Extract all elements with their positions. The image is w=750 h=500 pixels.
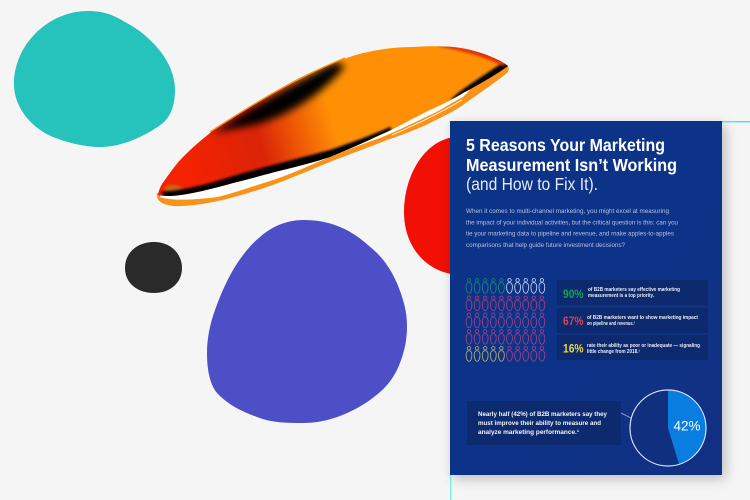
thin cyan line: bottom left	[450, 475, 451, 500]
callout: nearly half: Nearly half (42%) of B2B marketers say they	[478, 411, 607, 418]
pictogram: 10 by 5 people	[466, 278, 545, 361]
title: (and How to Fix It).	[466, 174, 598, 194]
blob: purple	[207, 220, 407, 423]
stat: 90%: measurement is a top priority.	[588, 293, 655, 299]
lens white streak in rim	[392, 100, 462, 135]
stat: 90%	[557, 280, 708, 305]
orange lens shape	[156, 46, 509, 206]
lens top fringe	[210, 58, 345, 132]
callout: nearly half: analyze marketing performance.¹	[478, 429, 579, 436]
blob: red	[404, 137, 480, 275]
panel: infographic card	[450, 121, 722, 475]
lens inner white rim	[160, 90, 470, 200]
stat: 67%: on pipeline and revenue.¹	[587, 321, 635, 327]
blob: teal	[14, 11, 175, 147]
stat: 90%: 90%	[563, 289, 584, 301]
title: 5 Reasons Your Marketing	[466, 135, 665, 155]
intro text: tie your marketing data to pipeline and revenue, and make apples-to-apples	[466, 230, 675, 238]
stat: 16%	[557, 335, 708, 360]
lens outer orange rim	[157, 65, 509, 206]
stat: 67%	[557, 308, 708, 333]
stat: 16%: little change from 2018.¹	[587, 349, 640, 355]
pie chart: 42%: 42%	[673, 418, 701, 434]
title	[466, 135, 677, 194]
stat: 16%: 16%	[563, 344, 584, 356]
lens gradient body	[158, 46, 508, 196]
stat: 16%: rate their ability as poor or inadequate — signaling	[587, 343, 700, 349]
intro text: comparisons that help guide future investment decisions?	[466, 242, 625, 249]
pie chart: 42%	[630, 390, 706, 466]
intro text	[466, 208, 678, 249]
blob: dark circle	[125, 242, 182, 293]
card background	[450, 121, 722, 475]
connector line	[621, 413, 631, 418]
intro text: When it comes to multi-channel marketing, you might excel at measuring	[466, 208, 669, 215]
callout: nearly half	[467, 401, 621, 445]
title: Measurement Isn’t Working	[466, 155, 677, 175]
stat: 67%: 67%	[563, 316, 584, 328]
stat: 67%: of B2B marketers want to show marketing impact	[587, 315, 698, 321]
thin cyan line: top right	[722, 121, 750, 122]
callout: nearly half: must improve their ability to measure and	[478, 420, 601, 427]
panel shadow	[453, 125, 726, 479]
intro text: the impact of your individual activities, but the critical question is this: can you	[466, 220, 678, 226]
stat: 90%: of B2B marketers say effective marketing	[588, 287, 680, 293]
